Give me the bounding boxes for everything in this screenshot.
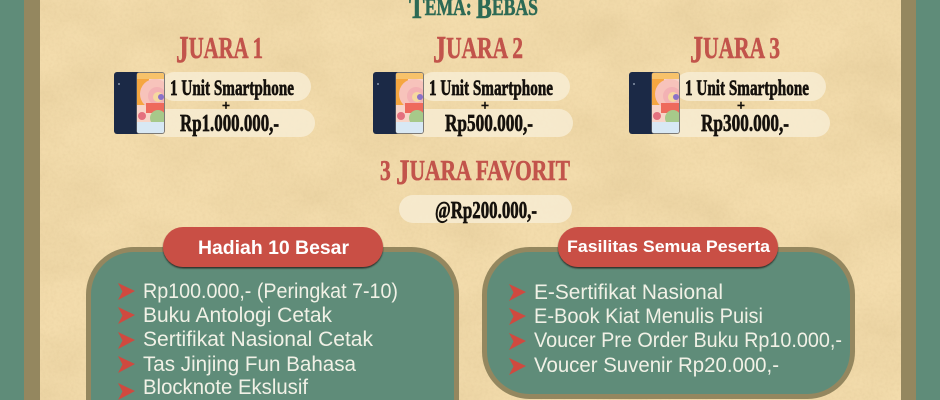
pill: smartphone [419, 72, 570, 101]
prize column: juara 3 [629, 29, 830, 137]
icon: smartphone [114, 72, 170, 134]
pill: smartphone [675, 72, 826, 101]
plus sign: + [222, 99, 230, 114]
heading: juara 1: J [176, 29, 189, 71]
icon: smartphone [629, 72, 685, 134]
list items [118, 280, 398, 400]
badge: hadiah 10 besar [163, 227, 383, 267]
heading: juara favorit: UARA FAVORIT [409, 155, 570, 187]
pill: favorit prize [399, 195, 572, 224]
pill: cash [148, 109, 315, 137]
panel body [484, 250, 852, 396]
heading: juara 3: J [690, 29, 703, 71]
panel: fasilitas semua peserta [484, 227, 852, 396]
badge: fasilitas semua peserta: Fasilitas Semua Peserta [567, 237, 771, 256]
heading: juara 3: UARA 3 [703, 30, 780, 65]
panel body [88, 250, 456, 400]
prize text: cash: Rp300.000,- [701, 111, 789, 137]
plus sign: + [737, 99, 745, 114]
badge: fasilitas semua peserta [558, 227, 778, 267]
heading: juara 2: UARA 2 [446, 30, 523, 65]
item: Rp100.000,- (Peringkat 7-10) [143, 280, 398, 303]
pill: cash [406, 109, 573, 137]
heading: juara 2: J [433, 29, 446, 71]
item: Voucer Suvenir Rp20.000,- [534, 354, 779, 377]
prize column: juara 1 [114, 29, 315, 137]
pill: favorit prize: @Rp200.000,- [435, 198, 537, 224]
item: Blocknote Ekslusif [143, 376, 308, 399]
prize text: smartphone: 1 Unit Smartphone [170, 75, 294, 100]
pill: smartphone [160, 72, 311, 101]
prize text: cash: Rp1.000.000,- [180, 111, 279, 137]
heading: juara favorit: J [396, 152, 409, 192]
item: Tas Jinjing Fun Bahasa [143, 353, 356, 376]
prize text: smartphone: 1 Unit Smartphone [429, 75, 553, 100]
heading: juara 1: UARA 1 [189, 30, 263, 65]
item: Voucer Pre Order Buku Rp10.000,- [534, 329, 842, 352]
panel: hadiah 10 besar [88, 227, 456, 400]
prize column: juara 2 [373, 29, 573, 137]
heading: juara favorit: 3 [380, 155, 394, 187]
pill: cash [663, 109, 830, 137]
prize text: cash: Rp500.000,- [445, 111, 533, 137]
plus sign: + [481, 99, 489, 114]
icon: smartphone [373, 72, 429, 134]
prize text: smartphone: 1 Unit Smartphone [685, 75, 809, 100]
item: Buku Antologi Cetak [143, 304, 332, 327]
item: E-Sertifikat Nasional [534, 281, 723, 304]
list items [509, 281, 842, 377]
item: Sertifikat Nasional Cetak [143, 328, 373, 351]
item: E-Book Kiat Menulis Puisi [534, 305, 763, 328]
badge: hadiah 10 besar: Hadiah 10 Besar [198, 238, 350, 259]
